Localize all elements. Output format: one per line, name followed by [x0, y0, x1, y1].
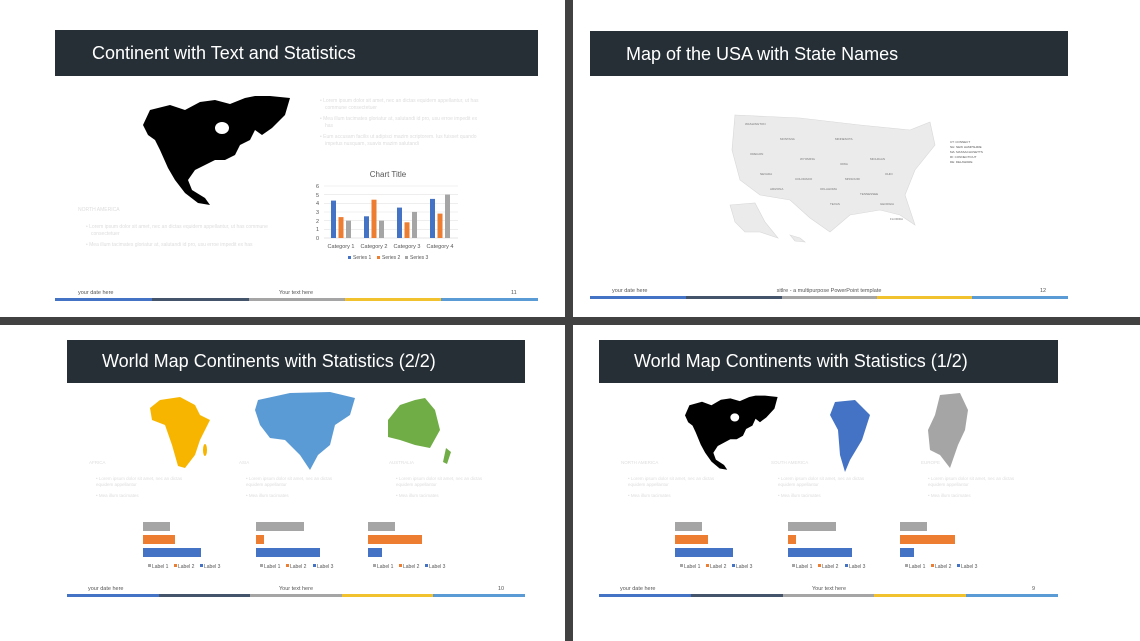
- chart: column chart: Series 2: [382, 255, 401, 261]
- footer: Your text here: [279, 290, 313, 296]
- map: USA: TEXAS: [830, 202, 840, 206]
- title bar: [599, 340, 1058, 383]
- text blocks: continents: • Mea illum tacimates: [246, 493, 289, 498]
- bar charts: [675, 522, 978, 570]
- footer: sitlre - a multipurpose PowerPoint template: [777, 288, 881, 294]
- text blocks: continents: • Mea illum tacimates: [778, 493, 821, 498]
- chart: column chart: 3: [316, 210, 319, 216]
- panel: map of the USA: [573, 0, 1140, 317]
- text block: bullets: has: [325, 123, 334, 129]
- text blocks: continents: • Lorem ipsum dolor sit amet, nec an dictas: [246, 476, 333, 481]
- panel: world map continents 1/2: [573, 325, 1140, 641]
- text block: bullets: commune consectetuer: [325, 105, 377, 111]
- map: USA: MICHIGAN: [870, 157, 885, 161]
- text block: bullets: impetus nusquam, suavis mazim salutandi: [325, 141, 419, 147]
- map: USA: COLORADO: [795, 177, 813, 181]
- title bar: Continent with Text and Statistics: [92, 43, 356, 63]
- bar charts: Label 1: [796, 564, 813, 570]
- text blocks: continents: equidem appellantur: [396, 482, 437, 487]
- text blocks: continents: • Lorem ipsum dolor sit amet, nec an dictas: [778, 476, 865, 481]
- title bar: World Map Continents with Statistics (2/2): [102, 351, 436, 371]
- footer: 12: [1040, 288, 1046, 294]
- text blocks: continents: • Lorem ipsum dolor sit amet, nec an dictas: [396, 476, 483, 481]
- footer: 9: [1032, 586, 1035, 592]
- text block: north america: consectetuer: [91, 231, 120, 237]
- chart: column chart: Series 3: [410, 255, 429, 261]
- text blocks: continents: • Lorem ipsum dolor sit amet, nec an dictas: [628, 476, 715, 481]
- footer: 11: [511, 290, 517, 296]
- bar charts: Label 1: [684, 564, 701, 570]
- map: south america: [830, 400, 870, 472]
- chart: column chart: 2: [316, 219, 319, 225]
- legend: small states list: DE: DELAWARE: [950, 160, 972, 164]
- bar charts: Label 1: [909, 564, 926, 570]
- text block: north america: • Lorem ipsum dolor sit amet, nec an dictas equidem appellantur, ut has commune: [86, 224, 268, 230]
- map: USA: [730, 115, 935, 242]
- legend: small states list: CT: CONNECT: [950, 140, 970, 144]
- chart: column chart: [316, 170, 458, 261]
- legend: small states list: [950, 140, 983, 164]
- bar charts: Label 2: [710, 564, 727, 570]
- footer: [55, 290, 538, 301]
- map: USA: IOWA: [840, 162, 848, 166]
- bar charts: Label 3: [317, 564, 334, 570]
- bar charts: Label 2: [822, 564, 839, 570]
- text blocks: continents: • Mea illum tacimates: [628, 493, 671, 498]
- map: USA: WYOMING: [800, 157, 816, 161]
- bar charts: Label 2: [935, 564, 952, 570]
- map: africa: [150, 397, 210, 468]
- text blocks: continents: equidem appellantur: [628, 482, 669, 487]
- bar charts: Label 2: [403, 564, 420, 570]
- footer: [67, 586, 525, 597]
- text blocks: continents: equidem appellantur: [96, 482, 137, 487]
- chart: column chart: 6: [316, 184, 319, 190]
- text blocks: continents: • Lorem ipsum dolor sit amet, nec an dictas: [928, 476, 1015, 481]
- title bar: [67, 340, 525, 383]
- panel: continent with text and statistics: [0, 0, 565, 317]
- map: asia: [255, 392, 355, 470]
- text blocks: continents: EUROPE: [921, 460, 940, 465]
- legend: small states list: MA: MASSACHUSETTS: [950, 150, 983, 154]
- map: USA: FLORIDA: [890, 217, 903, 221]
- map: USA: MINNESOTA: [835, 137, 853, 141]
- map: USA: NEVADA: [760, 172, 772, 176]
- text blocks: continents: • Mea illum tacimates: [928, 493, 971, 498]
- bar charts: Label 3: [961, 564, 978, 570]
- map: USA: WASHINGTON: [745, 122, 766, 126]
- map: USA: ARIZONA: [770, 187, 783, 191]
- text blocks: continents: • Lorem ipsum dolor sit amet, nec an dictas: [96, 476, 183, 481]
- footer: 10: [498, 586, 504, 592]
- map: USA: OHIO: [885, 172, 893, 176]
- bar charts: Label 2: [178, 564, 195, 570]
- text block: north america: [78, 207, 268, 248]
- chart: column chart: Category 4: [427, 244, 453, 250]
- title bar: Map of the USA with State Names: [626, 44, 898, 64]
- chart: column chart: 5: [316, 193, 319, 199]
- text blocks: continents: ASIA: [239, 460, 249, 465]
- bar charts: [143, 522, 446, 570]
- text blocks: continents: • Mea illum tacimates: [96, 493, 139, 498]
- text block: north america: • Mea illum tacimates gloriatur at, salutandi id pro, usu erroe impedit ex has: [86, 242, 253, 248]
- text block: bullets: • Lorem ipsum dolor sit amet, nec an dictas equidem appellantur, ut has: [320, 98, 479, 104]
- bar charts: Label 3: [849, 564, 866, 570]
- footer: Your text here: [279, 586, 313, 592]
- map: USA: MISSOURI: [845, 177, 860, 181]
- bar charts: Label 1: [264, 564, 281, 570]
- map: europe: [928, 393, 968, 468]
- text blocks: continents: NORTH AMERICA: [621, 460, 658, 465]
- text blocks: continents: SOUTH AMERICA: [771, 460, 808, 465]
- text blocks: continents: equidem appellantur: [778, 482, 819, 487]
- map: USA: GEORGIA: [880, 202, 894, 206]
- text blocks: continents: AUSTRALIA: [389, 460, 414, 465]
- bar charts: Label 3: [736, 564, 753, 570]
- footer: your date here: [620, 586, 655, 592]
- chart: column chart: Series 1: [353, 255, 372, 261]
- bar charts: Label 3: [429, 564, 446, 570]
- text block: north america: NORTH AMERICA: [78, 207, 120, 213]
- text block: bullets: [320, 98, 479, 147]
- footer: [590, 288, 1068, 299]
- footer: your date here: [88, 586, 123, 592]
- chart: column chart: Category 3: [394, 244, 420, 250]
- legend: small states list: NH: NEW HAMPSHIRE: [950, 145, 982, 149]
- legend: small states list: RI: CONNECTICUT: [950, 155, 977, 159]
- text blocks: continents: [89, 460, 483, 498]
- footer: [599, 586, 1058, 597]
- map: australia: [388, 398, 451, 464]
- chart: column chart: Chart Title: [370, 170, 407, 179]
- bar charts: Label 2: [290, 564, 307, 570]
- map: USA: OKLAHOMA: [820, 187, 837, 191]
- text blocks: continents: equidem appellantur: [928, 482, 969, 487]
- title bar: [55, 30, 538, 76]
- map: north america: [143, 96, 290, 205]
- footer: Your text here: [812, 586, 846, 592]
- bar charts: Label 3: [204, 564, 221, 570]
- panel: world map continents 2/2: [0, 325, 565, 641]
- title bar: [590, 31, 1068, 76]
- chart: column chart: 4: [316, 201, 319, 207]
- map: USA: TENNESSEE: [860, 192, 878, 196]
- text block: bullets: • Eum accusam facilis ut adipisci mazim scriptorem. Ius fuisset quando: [320, 134, 477, 140]
- chart: column chart: Category 1: [328, 244, 354, 250]
- footer: your date here: [612, 288, 647, 294]
- map: USA: OREGON: [750, 152, 763, 156]
- chart: column chart: 1: [316, 227, 319, 233]
- text blocks: continents: AFRICA: [89, 460, 106, 465]
- text block: bullets: • Mea illum tacimates gloriatur at, salutandi id pro, usu erroe impedit ex: [320, 116, 478, 122]
- map: USA: MONTANA: [780, 137, 795, 141]
- title bar: World Map Continents with Statistics (1/2): [634, 351, 968, 371]
- chart: column chart: Category 2: [361, 244, 387, 250]
- footer: your date here: [78, 290, 113, 296]
- bar charts: Label 1: [152, 564, 169, 570]
- chart: column chart: 0: [316, 236, 319, 242]
- map: north america: [685, 396, 778, 470]
- text blocks: continents: • Mea illum tacimates: [396, 493, 439, 498]
- text blocks: continents: [621, 460, 1015, 498]
- bar charts: Label 1: [377, 564, 394, 570]
- text blocks: continents: equidem appellantur: [246, 482, 287, 487]
